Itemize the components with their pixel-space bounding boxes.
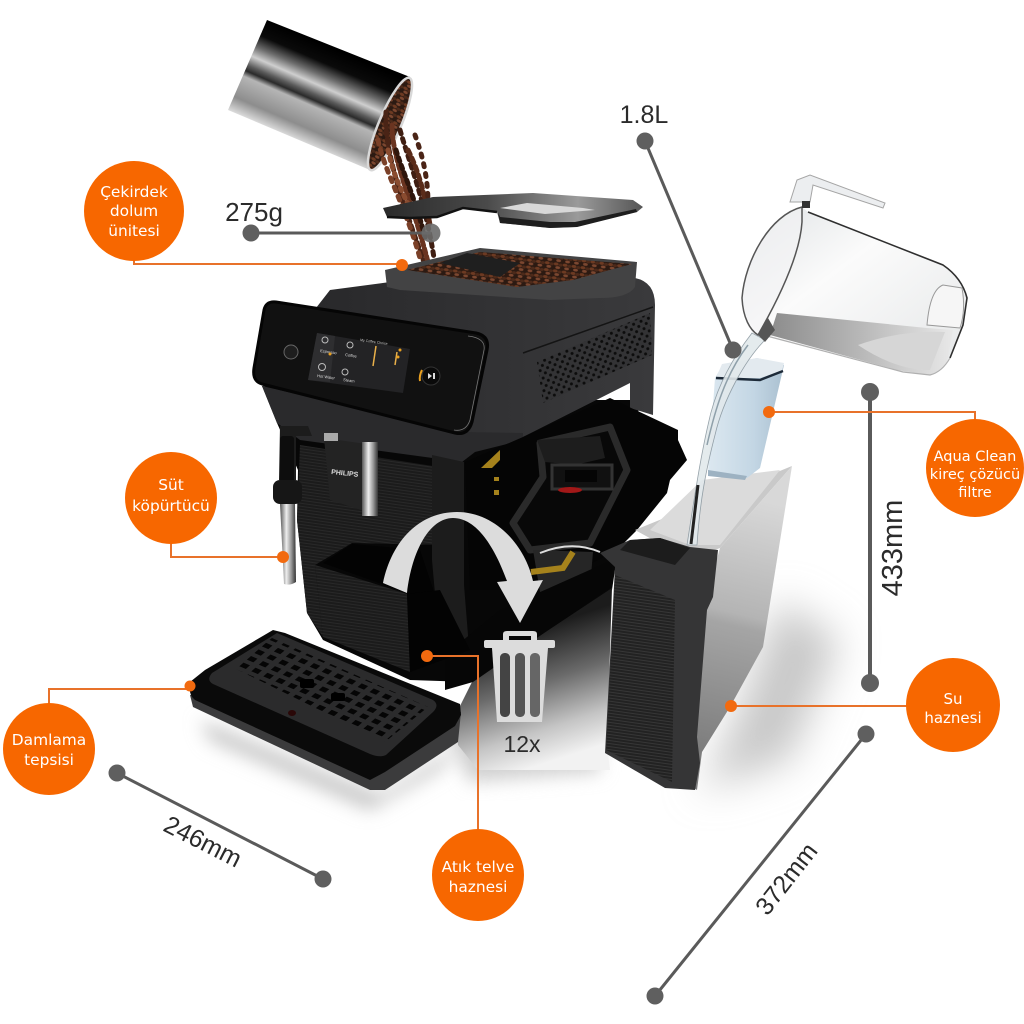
display <box>308 333 410 393</box>
trash bin icon <box>484 631 555 722</box>
callout: Su haznesi: Su <box>943 690 963 708</box>
Aqua Clean filter <box>708 358 784 480</box>
brew mechanism <box>537 436 612 493</box>
dimension: 372mm <box>646 726 874 1004</box>
falling coffee beans <box>378 112 434 262</box>
callout: Atık telve haznesi <box>421 650 524 921</box>
tank outer face <box>680 466 792 790</box>
service door <box>465 398 687 590</box>
dimension: 275g: 275g <box>225 197 283 227</box>
display: Hot Water <box>317 373 336 381</box>
milk frother <box>273 426 312 585</box>
power button <box>284 345 298 359</box>
water tank <box>600 466 792 790</box>
inner vertical panel <box>432 455 470 660</box>
drip grate <box>209 633 436 756</box>
dimension: 275g <box>225 197 440 242</box>
display: Espresso <box>320 348 338 355</box>
callout: Çekirdek dolum ünitesi: Çekirdek <box>100 183 168 201</box>
callout: Aqua Clean kireç çözücü filtre: Aqua Clean <box>934 449 1016 465</box>
callout: Süt köpürtücü: köpürtücü <box>132 497 210 515</box>
callout: Aqua Clean kireç çözücü filtre: kireç çözücü <box>930 467 1020 483</box>
callout: Çekirdek dolum ünitesi: ünitesi <box>108 222 160 240</box>
drawer <box>533 550 593 592</box>
callout: Süt köpürtücü: Süt <box>158 476 184 494</box>
display: Coffee <box>345 352 358 359</box>
coffee dispenser: PHILIPS <box>331 469 359 479</box>
drip tray <box>190 630 461 790</box>
textured body panel <box>297 445 447 637</box>
dimension: 1.8L <box>620 101 742 358</box>
under-panel housing band <box>262 386 523 462</box>
callout: Çekirdek dolum ünitesi: dolum <box>110 202 158 220</box>
bean hopper lid <box>383 193 643 228</box>
callout: Damlama tepsisi <box>3 680 196 795</box>
machine: top and side housing <box>260 278 655 440</box>
dimension: 372mm: 372mm <box>750 838 823 921</box>
callout: Su haznesi <box>725 658 1000 752</box>
bean hopper tray with beans <box>385 248 637 300</box>
display: My Coffee Choice <box>360 338 388 346</box>
base panel beside the grounds container <box>458 588 612 770</box>
glass jug <box>742 175 967 375</box>
water in jug <box>770 313 953 375</box>
coffee bean canister <box>228 20 420 174</box>
callout: Aqua Clean kireç çözücü filtre <box>763 406 1024 517</box>
tank interior <box>635 466 792 560</box>
display: Steam <box>343 377 356 384</box>
coffee dispenser <box>324 433 378 516</box>
brew group frame <box>513 427 627 550</box>
callout: Damlama tepsisi: Damlama <box>12 731 86 749</box>
dimension: 433mm: 433mm <box>877 500 909 596</box>
jug mouth <box>742 207 802 335</box>
callout: Damlama tepsisi: tepsisi <box>24 751 74 769</box>
callout: Süt köpürtücü <box>125 452 289 563</box>
control panel <box>254 302 488 434</box>
dimension: 246mm <box>108 764 332 888</box>
label: 12x: 12x <box>503 731 541 757</box>
tray glossy rim <box>190 630 461 780</box>
jug handle <box>790 175 885 208</box>
tank front handle panel <box>600 538 718 790</box>
coffee grounds container <box>315 544 470 672</box>
dimension: 246mm: 246mm <box>159 810 246 873</box>
curved arrow <box>383 512 543 623</box>
start button <box>422 367 440 385</box>
water stream <box>687 333 765 545</box>
dimension: 433mm <box>861 383 909 692</box>
callout: Su haznesi: haznesi <box>924 709 982 727</box>
tray base <box>190 695 461 790</box>
callout: Çekirdek dolum ünitesi <box>84 161 408 271</box>
open service cavity <box>465 398 687 592</box>
callout: Atık telve haznesi: haznesi <box>449 878 507 896</box>
callout: Aqua Clean kireç çözücü filtre: filtre <box>958 485 992 501</box>
callout: Atık telve haznesi: Atık telve <box>442 858 514 876</box>
dimension: 1.8L: 1.8L <box>620 101 668 129</box>
floor shadow <box>200 600 840 810</box>
machine: lower body silhouette <box>262 386 640 682</box>
ventilation perforation <box>537 313 652 403</box>
